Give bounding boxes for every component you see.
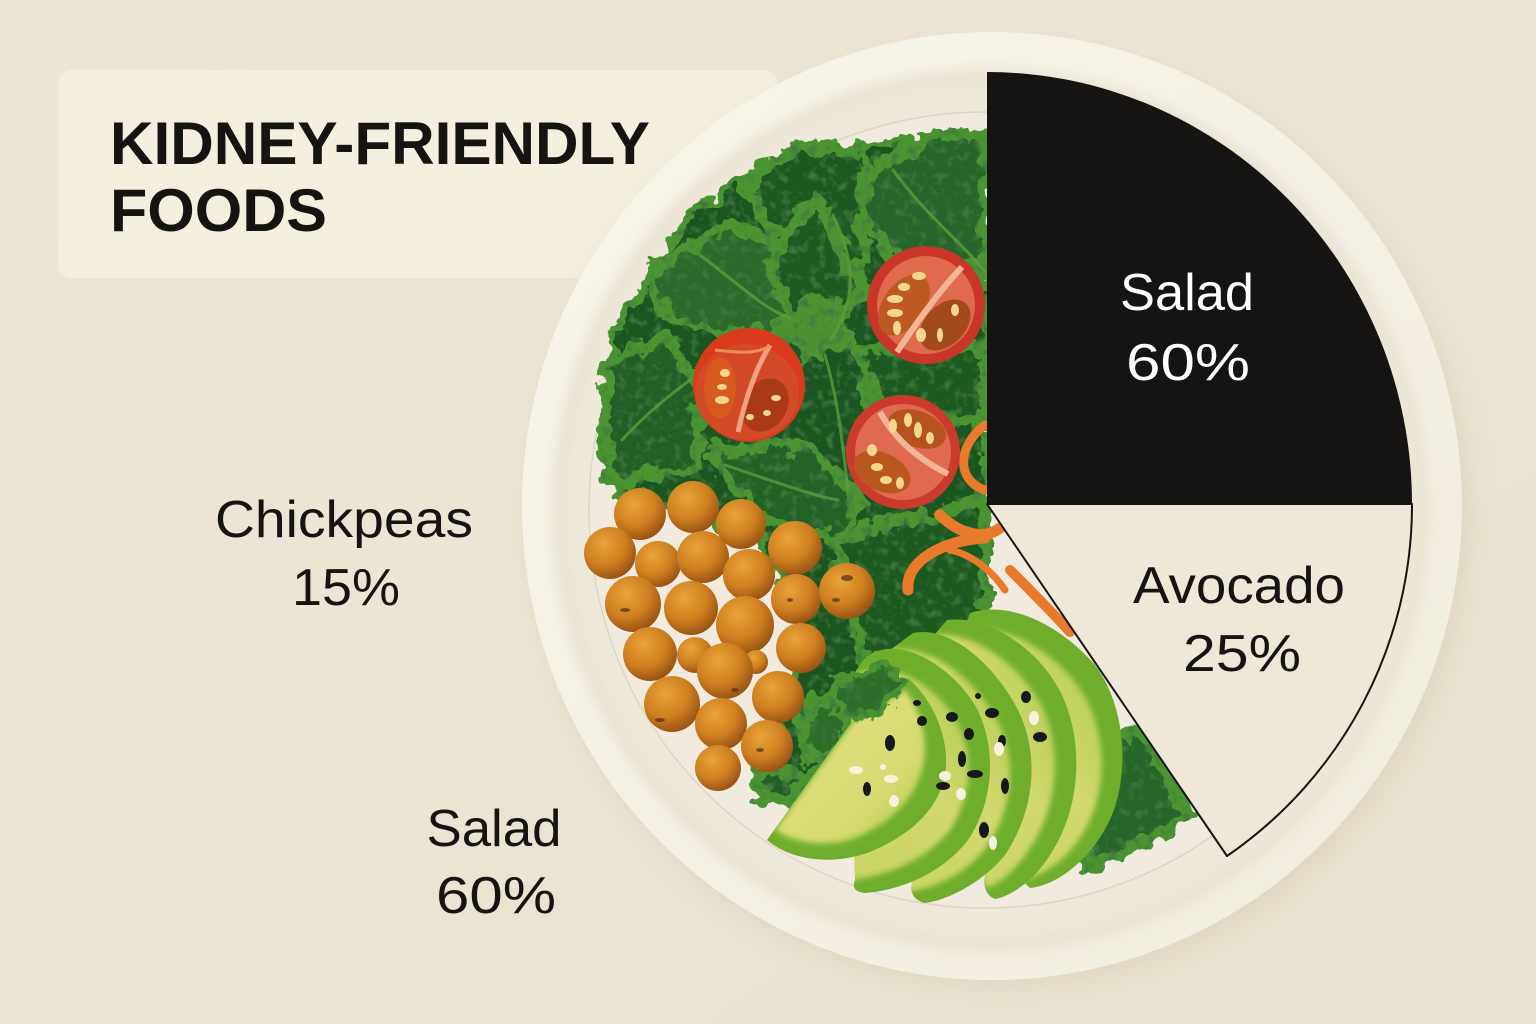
pie segment: avocado	[987, 504, 1412, 856]
pie segment: salad	[987, 72, 1412, 504]
tomatoes	[693, 246, 985, 509]
leaf: bottom	[710, 445, 860, 540]
kale veins	[622, 170, 985, 500]
label: salad 60% on wedge: 60%	[1126, 334, 1250, 392]
slice 2	[850, 649, 990, 893]
tomato 1	[867, 246, 985, 364]
leaf: bottom tip	[755, 775, 815, 800]
avocado slices	[767, 610, 1122, 903]
leaf: right	[860, 345, 985, 425]
sesame seeds: white	[849, 711, 1039, 850]
leaf: top middle	[745, 145, 865, 300]
label: salad 60%: 60%	[436, 867, 556, 925]
slice 3	[890, 632, 1032, 903]
leaf: upper left	[650, 225, 800, 335]
kale base	[600, 135, 985, 790]
chickpeas	[584, 481, 875, 791]
label: avocado 25%: 25%	[1183, 625, 1301, 683]
label: avocado 25%	[1133, 557, 1345, 683]
title: KIDNEY-FRIENDLY	[110, 110, 650, 177]
label: chickpeas 15%	[215, 491, 473, 617]
label: chickpeas 15%: Chickpeas	[215, 491, 473, 549]
label: chickpeas 15%: 15%	[292, 559, 400, 617]
title	[110, 110, 650, 244]
title panel	[58, 70, 778, 278]
leaf: top right	[860, 135, 985, 270]
label: avocado 25%: Avocado	[1133, 557, 1345, 615]
title: FOODS	[110, 177, 327, 244]
label: salad 60%: Salad	[426, 800, 562, 858]
leaf: lower right	[1085, 725, 1190, 870]
leaf: under carrots	[830, 500, 985, 670]
kale tuft over avocado	[835, 665, 905, 720]
tomato 2	[693, 328, 805, 442]
sesame seeds: black	[863, 691, 1047, 838]
label: salad 60%	[426, 800, 562, 925]
leaf: lower left of avocado	[800, 680, 850, 760]
label: salad 60% on wedge	[1120, 264, 1254, 392]
slice 4	[930, 620, 1076, 899]
leaf: inner middle	[768, 195, 860, 320]
tomato 3	[846, 395, 960, 509]
leaf: left	[605, 335, 700, 480]
slice 5	[955, 610, 1122, 888]
kale salad	[600, 135, 1190, 870]
label: salad 60% on wedge: Salad	[1120, 264, 1254, 322]
carrot ribbons	[908, 425, 1070, 632]
leaf: frilly centre	[775, 300, 850, 355]
slice 1	[767, 678, 946, 860]
plate	[522, 32, 1470, 988]
